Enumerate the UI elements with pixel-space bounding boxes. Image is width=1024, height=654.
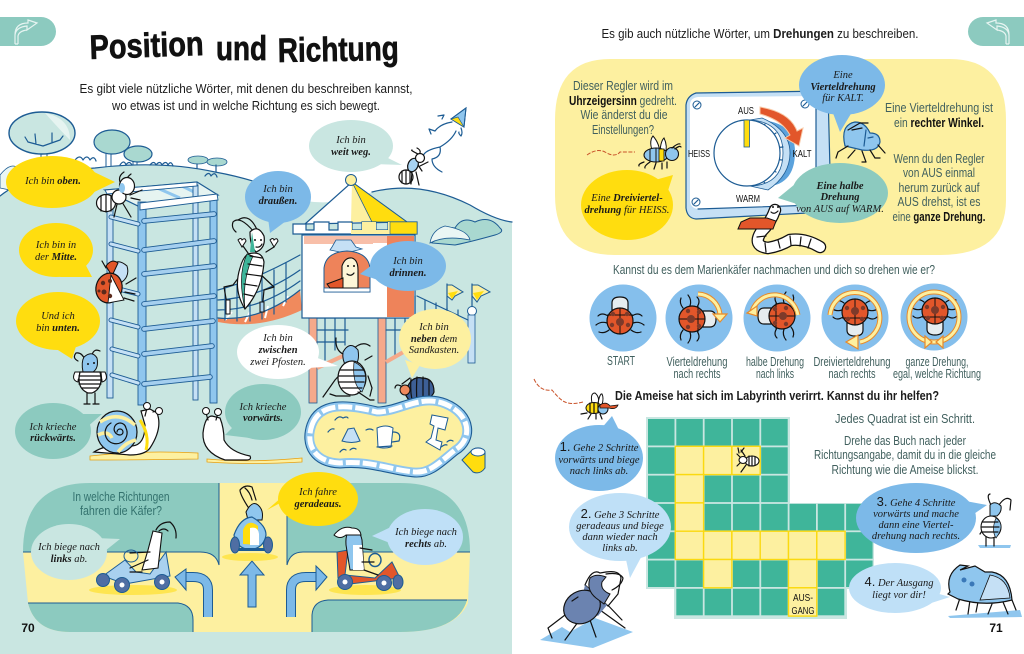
step: three-quarter turn <box>814 284 891 381</box>
frame posts <box>105 182 218 405</box>
title: Richtung <box>277 30 399 70</box>
heading: Drehungen: Es gib auch nützliche Wörter, um Drehungen zu beschreiben. <box>602 26 918 41</box>
speech bubble: rückwärts: rückwärts. <box>30 433 76 444</box>
dial labels <box>688 105 812 205</box>
speech bubble: unten: bin unten. <box>36 323 80 334</box>
right angle text: Eine Vierteldrehung ist <box>885 101 993 115</box>
speech bubble: Mitte: der Mitte. <box>35 252 77 263</box>
speech bubble: step 3: drehung nach rechts. <box>872 531 960 542</box>
grasshopper <box>224 218 278 314</box>
landscape: trees, hills and bushes <box>0 112 512 654</box>
speech bubble: step 2: 2. Gehe 3 Schritte <box>581 506 660 521</box>
speech bubble: Dreiviertel: drehung für HEISS. <box>585 205 669 216</box>
page number 70: 70 <box>21 621 35 635</box>
climbing frame <box>105 182 218 405</box>
verge bottom left <box>28 603 193 632</box>
speech bubble: zwischen: zwischen <box>257 345 298 356</box>
speech bubble: zwischen <box>237 325 338 379</box>
dial instruction text: Einstellungen? <box>592 123 654 137</box>
panel: dial <box>555 55 1006 255</box>
speech bubble: weit weg: weit weg. <box>331 147 371 158</box>
title: und <box>216 30 267 68</box>
right angle text: eine ganze Drehung. <box>892 210 986 224</box>
step: half turn: nach links <box>756 367 794 381</box>
ant in maze <box>737 448 759 472</box>
dial labels: KALT <box>792 148 812 160</box>
tower window with character <box>324 240 370 292</box>
speech bubble: zwischen: zwei Pfosten. <box>249 357 306 368</box>
flags and fence <box>415 284 490 363</box>
speech bubble: draußen <box>245 171 311 233</box>
speech bubble: unten <box>16 292 100 359</box>
dial instruction text: Uhrzeigersinn gedreht. <box>569 94 677 108</box>
sandbox <box>310 401 485 473</box>
speech bubble: step 2 <box>569 493 671 578</box>
speech bubble: zwischen: Ich bin <box>262 333 293 344</box>
speech bubble: halbe Drehung: Eine halbe <box>816 181 864 192</box>
speech bubble: step 3: 3. Gehe 4 Schritte <box>877 494 956 509</box>
step: half turn: halbe Drehung <box>746 355 804 369</box>
step: start: START <box>607 354 635 368</box>
labyrinth grid <box>646 417 874 619</box>
speech bubble: neben: neben dem <box>411 334 458 345</box>
step: quarter turn: Vierteldrehung <box>666 355 728 369</box>
step: full turn <box>893 284 981 381</box>
arrow: right <box>291 566 327 617</box>
title <box>89 25 399 70</box>
speech bubble: step 2: links ab. <box>602 543 638 554</box>
heading: Marienkäfer: Kannst du es dem Marienkäfer nachmachen und dich so drehen wie er? <box>613 263 935 277</box>
step instructions text <box>814 412 996 477</box>
speech bubble: rechts: Ich biege nach <box>394 527 457 538</box>
road question <box>72 489 170 518</box>
tower body <box>302 235 415 318</box>
speech bubble: Vierteldrehung: für KALT. <box>822 93 864 104</box>
speech bubble: Vierteldrehung: Vierteldrehung <box>810 82 876 93</box>
speech bubble: Dreiviertel: Eine Dreiviertel- <box>590 193 663 204</box>
panel background <box>555 59 1006 255</box>
exit label <box>792 592 814 617</box>
tower battlements <box>293 222 417 234</box>
speech bubble: step 4 <box>849 563 950 613</box>
speech bubble: geradeaus: Ich fahre <box>298 487 337 498</box>
speech bubble: Mitte: Ich bin in <box>35 240 76 251</box>
kart: right <box>329 527 403 595</box>
hills <box>0 165 512 654</box>
step: half turn <box>744 284 810 381</box>
speech bubble: step 3 <box>856 483 987 553</box>
yellow bucket <box>462 448 485 473</box>
frame rungs <box>111 214 214 384</box>
stag beetle <box>540 572 633 648</box>
heading: labyrinth: Die Ameise hat sich im Labyrinth verirrt. Kannst du ihr helfen? <box>615 388 939 403</box>
right angle text: AUS drehst, ist es <box>898 195 980 209</box>
speech bubble: step 1 <box>555 416 643 491</box>
trees: small <box>94 130 227 175</box>
subtitle <box>80 81 412 113</box>
arrow: left <box>175 569 208 617</box>
speech bubble: neben <box>399 309 471 378</box>
title: Position <box>89 25 204 67</box>
step: start <box>590 284 656 368</box>
worm <box>738 206 820 252</box>
speech bubble: drinnen: drinnen. <box>389 268 427 279</box>
road panel <box>23 483 470 632</box>
speech bubble: vorwärts: vorwärts. <box>243 413 283 424</box>
step: three-quarter turn: Dreivierteldrehung <box>814 355 891 369</box>
subtitle: Es gibt viele nützliche Wörter, mit denen du beschreiben kannst, <box>80 81 412 96</box>
right angle text: von AUS einmal <box>903 166 975 180</box>
blue beetle <box>836 122 885 162</box>
speech bubble: step 4: 4. Der Ausgang <box>865 574 933 589</box>
step: quarter turn <box>666 284 732 381</box>
ant on top <box>96 172 142 217</box>
speech bubble: drinnen: Ich bin <box>392 256 423 267</box>
speech bubble: halbe Drehung: Drehung <box>819 192 860 203</box>
speech bubble: oben: Ich bin oben. <box>24 176 81 187</box>
speech bubble: draußen: draußen. <box>259 196 297 207</box>
speech bubble: halbe Drehung <box>778 163 888 223</box>
speech bubble: weit weg <box>309 120 402 172</box>
dial knob <box>714 118 795 190</box>
yellow path cells <box>675 446 845 616</box>
speech bubble: drinnen <box>360 241 446 291</box>
speech bubble: Dreiviertel <box>581 170 673 240</box>
right page: navigation tab <box>968 17 1024 46</box>
step instructions text: Jedes Quadrat ist ein Schritt. <box>835 412 975 426</box>
dial instruction text: Dieser Regler wird im <box>573 79 673 93</box>
woodlouse <box>395 377 434 407</box>
speech bubble: step 3: vorwärts und mache <box>873 509 959 520</box>
bridge <box>218 255 302 324</box>
verge top left <box>23 483 219 565</box>
speech bubble: Vierteldrehung <box>799 55 885 132</box>
speech bubble: rechts <box>372 509 463 565</box>
green cells <box>648 419 873 615</box>
speech bubble: geradeaus <box>267 472 358 526</box>
kart: left <box>89 522 177 595</box>
speech bubble: neben: Sandkasten. <box>409 345 459 356</box>
rotation arrow <box>760 107 803 146</box>
road question: fahren die Käfer? <box>80 503 162 518</box>
step: quarter turn: nach rechts <box>674 367 720 381</box>
step instructions text: Drehe das Buch nach jeder <box>844 434 966 448</box>
dial labels: WARM <box>736 193 760 205</box>
bushes <box>432 220 502 245</box>
snail going backwards <box>90 402 198 460</box>
right angle text: ein rechter Winkel. <box>894 116 984 130</box>
right angle text: herum zurück auf <box>898 181 980 195</box>
speech bubble: rückwärts: Ich krieche <box>29 422 77 433</box>
speech bubble: rückwärts <box>15 403 102 459</box>
dial labels: AUS <box>738 105 754 117</box>
road question: In welche Richtungen <box>72 489 170 504</box>
speech bubble: unten: Und ich <box>41 311 75 322</box>
tower roof <box>305 174 407 224</box>
step: full turn: ganze Drehung, <box>906 355 968 369</box>
ladybird rotation row <box>590 284 981 381</box>
slug going forwards <box>202 408 302 464</box>
speech bubble: vorwärts <box>225 384 301 440</box>
right angle text: Wenn du den Regler <box>894 152 984 166</box>
speech bubble: links: Ich biege nach <box>37 542 100 553</box>
striped bug below <box>74 350 106 404</box>
dial instruction text: Wie änderst du die <box>580 108 668 122</box>
speech bubble: Mitte <box>19 223 93 277</box>
arrow: straight <box>240 561 264 607</box>
speech bubble: weit weg: Ich bin <box>335 135 366 146</box>
speech bubble: step 1: 1. Gehe 2 Schritte <box>560 439 639 454</box>
flying bug with cap <box>534 379 618 419</box>
grid background <box>646 417 874 619</box>
speech bubble: step 2: geradeaus und biege <box>576 521 664 532</box>
navigation tab: left <box>0 17 56 46</box>
dial labels: HEISS <box>688 148 710 160</box>
sand toys <box>328 415 453 452</box>
step instructions text: Richtung wie die Ameise blickst. <box>832 463 978 477</box>
regulator plate <box>686 91 830 219</box>
tower legs and net <box>309 318 412 403</box>
subtitle: wo etwas ist und in welche Richtung es sich bewegt. <box>111 98 380 113</box>
road surface <box>23 552 470 632</box>
verge bottom right <box>312 600 467 632</box>
dial instruction text <box>569 79 677 137</box>
speech bubble: draußen: Ich bin <box>262 184 293 195</box>
speech bubble: geradeaus: geradeaus. <box>294 499 341 510</box>
verge top right <box>287 483 470 565</box>
ladybird on frame <box>93 261 136 306</box>
speech bubble: links <box>31 524 120 580</box>
speech bubble: step 1: vorwärts und biege <box>558 455 640 466</box>
speech bubble: links: links ab. <box>51 554 87 565</box>
kite and ant <box>399 108 466 185</box>
tree: large <box>9 112 75 165</box>
frame top <box>105 182 218 207</box>
right angle text <box>885 101 993 224</box>
kart: middle <box>222 486 278 561</box>
bee <box>587 136 681 169</box>
step: three-quarter turn: nach rechts <box>828 367 876 381</box>
page number 71: 71 <box>989 621 1003 635</box>
striped beetle right <box>978 494 1011 548</box>
step: full turn: egal, welche Richtung <box>893 367 981 381</box>
speech bubble: Vierteldrehung: Eine <box>832 70 853 81</box>
speech bubble: step 4: liegt vor dir! <box>872 590 926 601</box>
speech bubble: step 3: dann eine Viertel- <box>878 520 954 531</box>
speech bubble: halbe Drehung: von AUS auf WARM. <box>796 204 884 215</box>
tower <box>293 174 417 403</box>
exit label: AUS- <box>793 592 813 604</box>
rhinoceros beetle <box>948 565 1022 618</box>
speech bubble: oben <box>6 156 115 208</box>
posts beetle <box>323 338 374 400</box>
speech bubble: rechts: rechts ab. <box>405 539 447 550</box>
speech bubble: vorwärts: Ich krieche <box>239 402 287 413</box>
speech bubble: step 2: dann wieder nach <box>582 532 658 543</box>
speech bubble: neben: Ich bin <box>418 322 449 333</box>
speech bubble: step 1: nach links ab. <box>570 466 628 477</box>
exit label: GANG <box>792 605 814 617</box>
